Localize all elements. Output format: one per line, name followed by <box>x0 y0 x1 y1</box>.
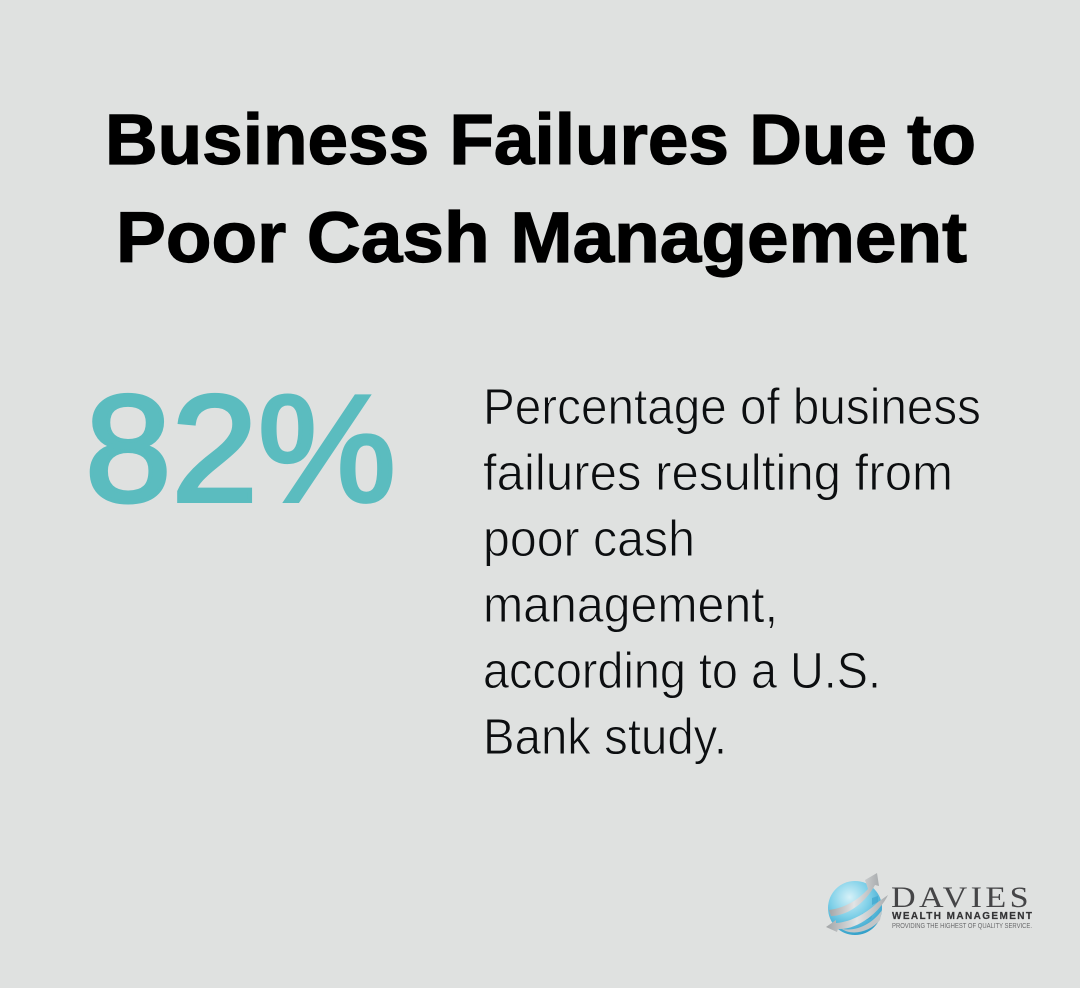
description text: according to a U.S. <box>483 642 881 699</box>
description text: failures resulting from <box>483 444 953 501</box>
logo: Davies Wealth Management <box>826 873 1032 935</box>
title: Business Failures Due to <box>105 101 976 180</box>
description text: Percentage of business <box>483 378 981 435</box>
statistic: 82%: 82% <box>85 364 396 534</box>
description text: management, <box>483 576 778 633</box>
description text <box>483 378 981 765</box>
title <box>105 101 976 278</box>
logo subtitle: WEALTH MANAGEMENT <box>892 911 1032 922</box>
description text: poor cash <box>483 510 695 567</box>
logo wordmark: DAVIES <box>891 881 1032 914</box>
description text: Bank study. <box>483 708 727 765</box>
logo tagline: PROVIDING THE HIGHEST OF QUALITY SERVICE. <box>892 923 1032 930</box>
icon: globe with arrows <box>826 873 888 935</box>
title: Poor Cash Management <box>116 199 967 278</box>
